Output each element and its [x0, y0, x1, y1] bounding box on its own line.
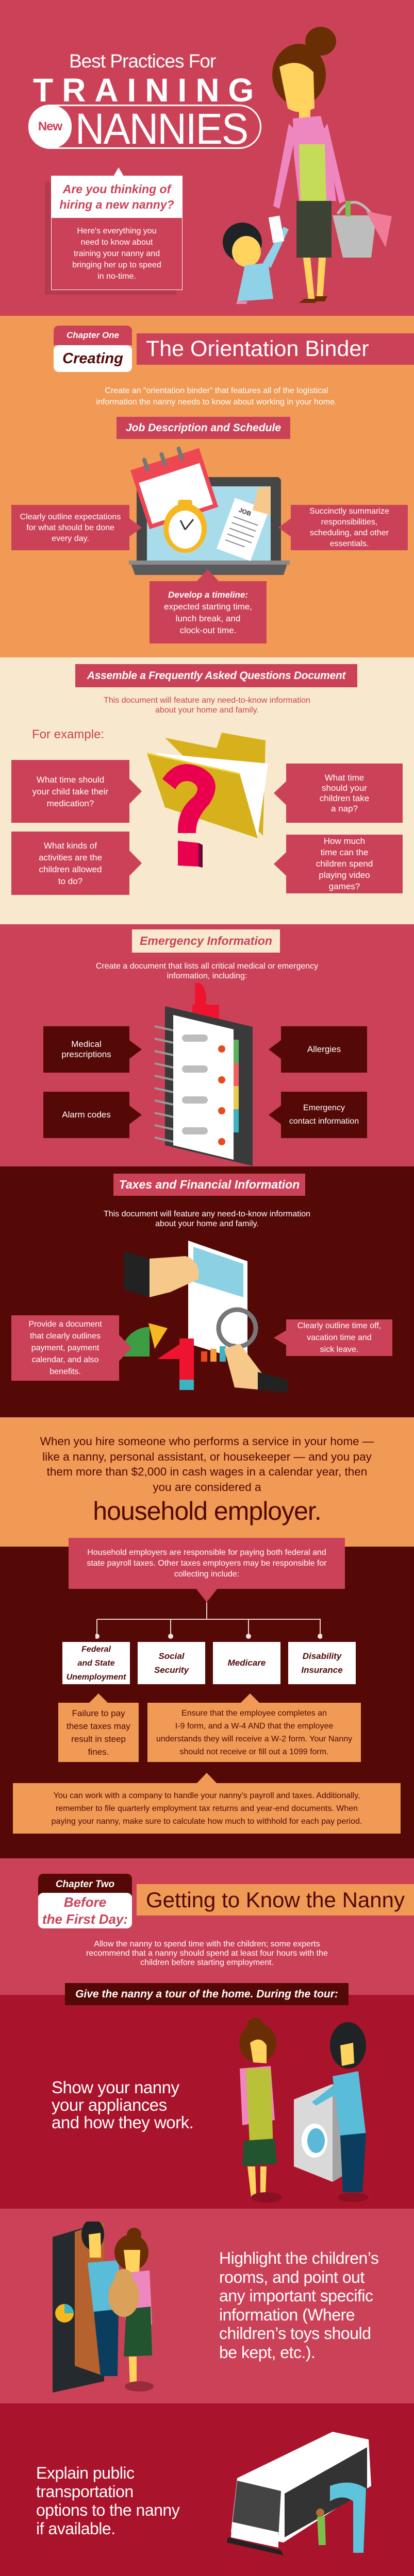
callout: thinking of hiring: Here's everything you [77, 227, 157, 235]
box: payroll company: You can work with a company to handle your nanny’s payroll and taxes. Additionally, [54, 1791, 360, 1800]
box: I-9 and W-4: should not receive or fill out a 1099 form. [179, 1748, 329, 1756]
box: alarm codes: Alarm codes [62, 1110, 111, 1120]
text: FAQ description [104, 696, 310, 715]
box: alarm codes [43, 1092, 142, 1138]
callout: thinking of hiring: hiring a new nanny? [59, 198, 174, 211]
box: time off: Clearly outline time off, [297, 1321, 381, 1330]
box: develop a timeline: clock-out time. [180, 625, 236, 635]
box: employer responsibilities: state payroll taxes. Other taxes employers may be responsible for [87, 1559, 327, 1568]
tax boxes: Social [158, 1651, 185, 1661]
box: payment document: that clearly outlines [30, 1332, 101, 1341]
text: highlight children's rooms: rooms, and point out [219, 2268, 365, 2286]
illustration: financial documents [124, 1241, 288, 1393]
text: household employer statement: household employer. [93, 1497, 321, 1526]
text: emergency description [96, 962, 319, 980]
title [28, 50, 262, 153]
box: develop a timeline: expected starting time, [164, 602, 252, 611]
illustration: folder with question mark [147, 733, 268, 868]
text: household employer statement: like a nanny, personal assistant, or housekeeper — and you pay [42, 1450, 372, 1463]
heading: job description [117, 417, 290, 439]
tax boxes: Unemployment [67, 1672, 126, 1682]
box: emergency contact: contact information [289, 1117, 359, 1126]
box: employer responsibilities: collecting include: [174, 1570, 239, 1579]
text: highlight children's rooms: any important specific [219, 2286, 373, 2305]
box: activities question: children allowed [39, 865, 102, 874]
text: household employer statement: them more than $2,000 in cash wages in a calendar year, then [47, 1465, 367, 1478]
box: video games question: How much [324, 836, 365, 846]
box: I-9 and W-4: understands they will receive a W-2 form. Your Nanny [156, 1734, 352, 1743]
box: payment document: Provide a document [28, 1320, 102, 1329]
box: time off: vacation time and [307, 1333, 372, 1342]
box: I-9 and W-4: Ensure that the employee completes an [181, 1708, 327, 1718]
text: emergency description: information, including: [167, 972, 247, 980]
illustration: laptop, calendar, clock: JOB [238, 506, 252, 517]
box: nap question: children take [320, 793, 369, 803]
box: employer responsibilities [69, 1538, 345, 1602]
box: allergies [269, 1026, 367, 1073]
box: payroll company: remember to file quarterly employment tax returns and year-end documents. When [56, 1804, 358, 1812]
box: video games question: games? [329, 882, 360, 891]
title: New [38, 120, 62, 133]
box: allergies: Allergies [307, 1044, 341, 1054]
box: outline expectations: every day. [52, 534, 89, 543]
text: household employer statement: you are considered a [153, 1481, 261, 1493]
illustration: door, women, teddy [53, 2222, 154, 2393]
box: outline expectations: for what should be done [26, 523, 114, 532]
box: failure to pay [58, 1693, 139, 1762]
text: appliances: your appliances [52, 2095, 167, 2114]
box: medication question: What time should [37, 775, 104, 784]
box: summarize responsibilities [278, 505, 408, 550]
box: nap question: should your [322, 783, 367, 792]
tree connector [95, 1602, 322, 1639]
text: public transportation: Explain public [36, 2464, 134, 2482]
box: activities question [11, 832, 142, 895]
box: medical prescriptions: prescriptions [61, 1049, 111, 1059]
box: medical prescriptions: Medical [71, 1039, 102, 1049]
text: FAQ description: about your home and family. [155, 706, 259, 715]
box: medication question: medication? [47, 799, 94, 808]
box: failure to pay: fines. [88, 1747, 109, 1757]
box: summarize responsibilities: responsibilities, [321, 518, 377, 527]
callout: thinking of hiring: need to know about [81, 238, 153, 246]
box: time off: sick leave. [320, 1345, 358, 1354]
box: summarize responsibilities: Succinctly summarize [309, 507, 389, 516]
text: highlight children's rooms: be kept, etc.). [219, 2343, 315, 2362]
box: medication question [11, 760, 142, 823]
box: develop a timeline: Develop a timeline: [168, 589, 248, 600]
text: highlight children's rooms [219, 2249, 378, 2362]
heading: job description: Job Description and Schedule [126, 421, 281, 434]
text: taxes description: This document will feature any need-to-know information [104, 1210, 310, 1218]
text: public transportation: if available. [36, 2519, 115, 2538]
box: payment document [11, 1315, 131, 1381]
illustration: clipboard [155, 983, 253, 1166]
callout: thinking of hiring: Are you thinking of [63, 182, 171, 196]
box: video games question: time can the [321, 848, 368, 857]
chapter two label: Chapter Two [56, 1879, 114, 1890]
text: household employer statement: When you hire someone who performs a service in your home — [40, 1435, 374, 1448]
heading: The Orientation Binder [137, 333, 414, 365]
box: nap question: What time [325, 773, 364, 782]
text: public transportation: transportation [36, 2482, 134, 2501]
tax boxes: and State [77, 1659, 114, 1667]
box: payment document: payment, payment [31, 1344, 99, 1352]
box: activities question: activities are the [39, 852, 102, 862]
text: emergency description: Create a document that lists all critical medical or emergency [96, 962, 318, 971]
text: appliances: and how they work. [52, 2113, 193, 2132]
chapter one label [54, 326, 132, 372]
text: time with children [86, 1940, 328, 1967]
box: video games question: children spend [316, 859, 373, 869]
text: time with children: children before starting employment. [140, 1958, 274, 1967]
box: emergency contact [269, 1092, 367, 1138]
callout: thinking of hiring: in no-time. [97, 272, 136, 280]
text: FAQ description: This document will feature any need-to-know information [104, 696, 310, 705]
text: public transportation: options to the nanny [36, 2501, 179, 2519]
heading: emergency information [132, 929, 280, 953]
tax boxes: Insurance [301, 1665, 343, 1675]
box: video games question: playing video [319, 870, 370, 880]
box: nap question [274, 764, 403, 823]
callout: thinking of hiring: training your nanny and [74, 249, 160, 258]
box: outline expectations [11, 505, 142, 550]
text: highlight children's rooms: Highlight the children’s [219, 2249, 378, 2267]
box: payroll company: paying your nanny, make sure to calculate how much to withhold for each pay period. [52, 1817, 362, 1826]
box: failure to pay: result in steep [71, 1734, 126, 1743]
intro text binder [96, 386, 337, 406]
tax boxes: Security [154, 1665, 189, 1675]
callout: thinking of hiring [45, 167, 183, 295]
box: activities question: to do? [58, 876, 82, 886]
intro text binder: information the nanny needs to know about working in your home. [96, 398, 337, 406]
box: time off [274, 1319, 392, 1356]
title: TRAINING [33, 72, 262, 109]
intro text binder: Create an “orientation binder” that features all of the logistical [105, 386, 328, 395]
heading: tour [65, 1983, 349, 2005]
text: time with children: Allow the nanny to spend time with the children; some experts [94, 1940, 320, 1948]
box: summarize responsibilities: scheduling, and other [310, 529, 389, 537]
illustration: bus [227, 2432, 371, 2555]
text: highlight children's rooms: children’s toys should [219, 2324, 371, 2343]
heading: tour: Give the nanny a tour of the home. During the tour: [75, 1988, 338, 2000]
text: appliances [52, 2078, 193, 2132]
box: I-9 and W-4: I-9 form, and a W-4 AND that the employee [175, 1722, 333, 1730]
illustration: laptop, calendar, clock [129, 447, 290, 575]
heading: FAQ document: Assemble a Frequently Asked Questions Document [87, 670, 345, 681]
box: nap question: a nap? [331, 804, 358, 813]
box: failure to pay: Failure to pay [72, 1708, 125, 1718]
illustration: nanny and boy [223, 27, 392, 304]
tax boxes: Medicare [228, 1658, 266, 1668]
chapter one label: Chapter One [67, 330, 119, 340]
heading: taxes and financial: Taxes and Financial Information [119, 1178, 300, 1191]
heading: FAQ document [75, 664, 357, 687]
box: medical prescriptions [43, 1026, 142, 1073]
box: outline expectations: Clearly outline expectations [20, 512, 121, 521]
box: develop a timeline: lunch break, and [176, 613, 240, 623]
box: payment document: benefits. [49, 1367, 81, 1376]
illustration: washing machine and two women [239, 2018, 369, 2202]
heading: getting to know the nanny: Getting to Know the Nanny [146, 1888, 405, 1912]
chapter two label [38, 1874, 132, 1928]
heading: emergency information: Emergency Information [140, 934, 272, 947]
text: highlight children's rooms: information (Where [219, 2305, 355, 2324]
box: emergency contact: Emergency [303, 1104, 345, 1112]
chapter two label: the First Day: [42, 1911, 128, 1927]
heading: taxes and financial [113, 1174, 305, 1196]
text: for example: For example: [32, 727, 104, 741]
title: Best Practices For [69, 50, 216, 72]
box: payroll company [13, 1773, 401, 1834]
tax boxes [62, 1642, 356, 1684]
text: taxes description [104, 1210, 310, 1228]
box: failure to pay: these taxes may [67, 1721, 130, 1731]
text: public transportation [36, 2464, 180, 2538]
box: medication question: your child take their [32, 786, 108, 796]
box: develop a timeline [150, 569, 267, 643]
chapter one label: Creating [62, 350, 123, 367]
box: employer responsibilities: Household employers are responsible for paying both federal and [87, 1548, 326, 1557]
tax boxes: Federal [81, 1645, 111, 1654]
title: NANNIES [75, 105, 247, 153]
chapter two label: Before [64, 1894, 106, 1909]
box: summarize responsibilities: essentials. [330, 539, 369, 548]
heading: The Orientation Binder: The Orientation Binder [146, 336, 369, 361]
text: appliances: Show your nanny [52, 2078, 179, 2097]
text: taxes description: about your home and family. [155, 1219, 259, 1228]
box: activities question: What kinds of [44, 841, 97, 850]
callout: thinking of hiring: bringing her up to speed [72, 261, 161, 269]
box: video games question [274, 835, 403, 893]
tax boxes: Disability [303, 1651, 341, 1661]
text: time with children: recommend that a nanny should spend at least four hours with the [86, 1949, 328, 1958]
text: household employer statement [40, 1435, 374, 1526]
box: payment document: calendar, and also [32, 1355, 98, 1364]
box: I-9 and W-4 [147, 1693, 361, 1762]
